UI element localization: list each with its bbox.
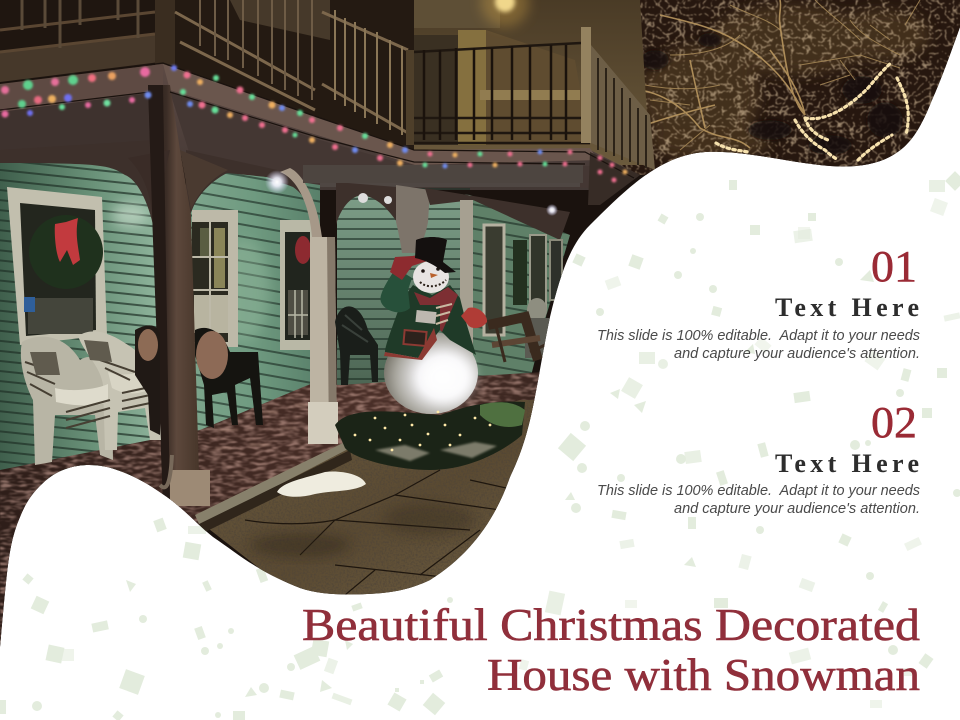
third column and far details xyxy=(460,200,562,365)
green siding walls xyxy=(0,160,570,480)
title: House with Snowman xyxy=(487,650,920,700)
upper storey centre wall xyxy=(414,0,646,165)
left window with wreath xyxy=(7,187,107,345)
top hat xyxy=(415,237,456,273)
description: and capture your audience's attention. xyxy=(674,501,920,517)
main porch column xyxy=(148,85,228,506)
ceiling lamps xyxy=(265,170,558,216)
paving stones xyxy=(195,400,560,600)
heading: Text Here xyxy=(775,293,919,322)
bench xyxy=(488,317,545,362)
wreath xyxy=(29,215,103,289)
lit bare tree xyxy=(620,0,960,175)
eaves band with fascia xyxy=(0,64,640,205)
stair rail on the right xyxy=(591,45,655,170)
confetti pattern background xyxy=(0,171,960,720)
snow patch xyxy=(277,472,366,497)
description: and capture your audience's attention. xyxy=(674,346,920,362)
snowman body xyxy=(384,332,478,414)
head xyxy=(413,261,449,293)
red bow xyxy=(55,218,80,265)
snowman xyxy=(380,237,487,414)
second porch column xyxy=(280,165,583,444)
item 01 xyxy=(597,242,920,362)
arches and porch ceiling xyxy=(0,140,570,253)
number 01: 01 xyxy=(871,242,917,291)
green jacket xyxy=(385,285,476,358)
description: This slide is 100% editable. Adapt it to your needs xyxy=(597,328,920,344)
coloured string lights xyxy=(0,63,634,182)
raised arm xyxy=(380,274,412,312)
red mitten hand and sleeve xyxy=(390,256,426,280)
description: This slide is 100% editable. Adapt it to your needs xyxy=(597,483,920,499)
title: Beautiful Christmas Decorated xyxy=(302,600,920,650)
heading: Text Here xyxy=(775,449,919,478)
lit garland xyxy=(335,402,525,470)
scarf xyxy=(414,287,458,332)
item 02 xyxy=(597,398,920,517)
middle windows xyxy=(192,210,312,350)
number 02: 02 xyxy=(871,398,917,447)
brick floor xyxy=(0,370,550,650)
dark porch chairs xyxy=(135,306,378,435)
upper left balcony and railings xyxy=(0,0,414,150)
stacked white chairs xyxy=(21,331,161,465)
